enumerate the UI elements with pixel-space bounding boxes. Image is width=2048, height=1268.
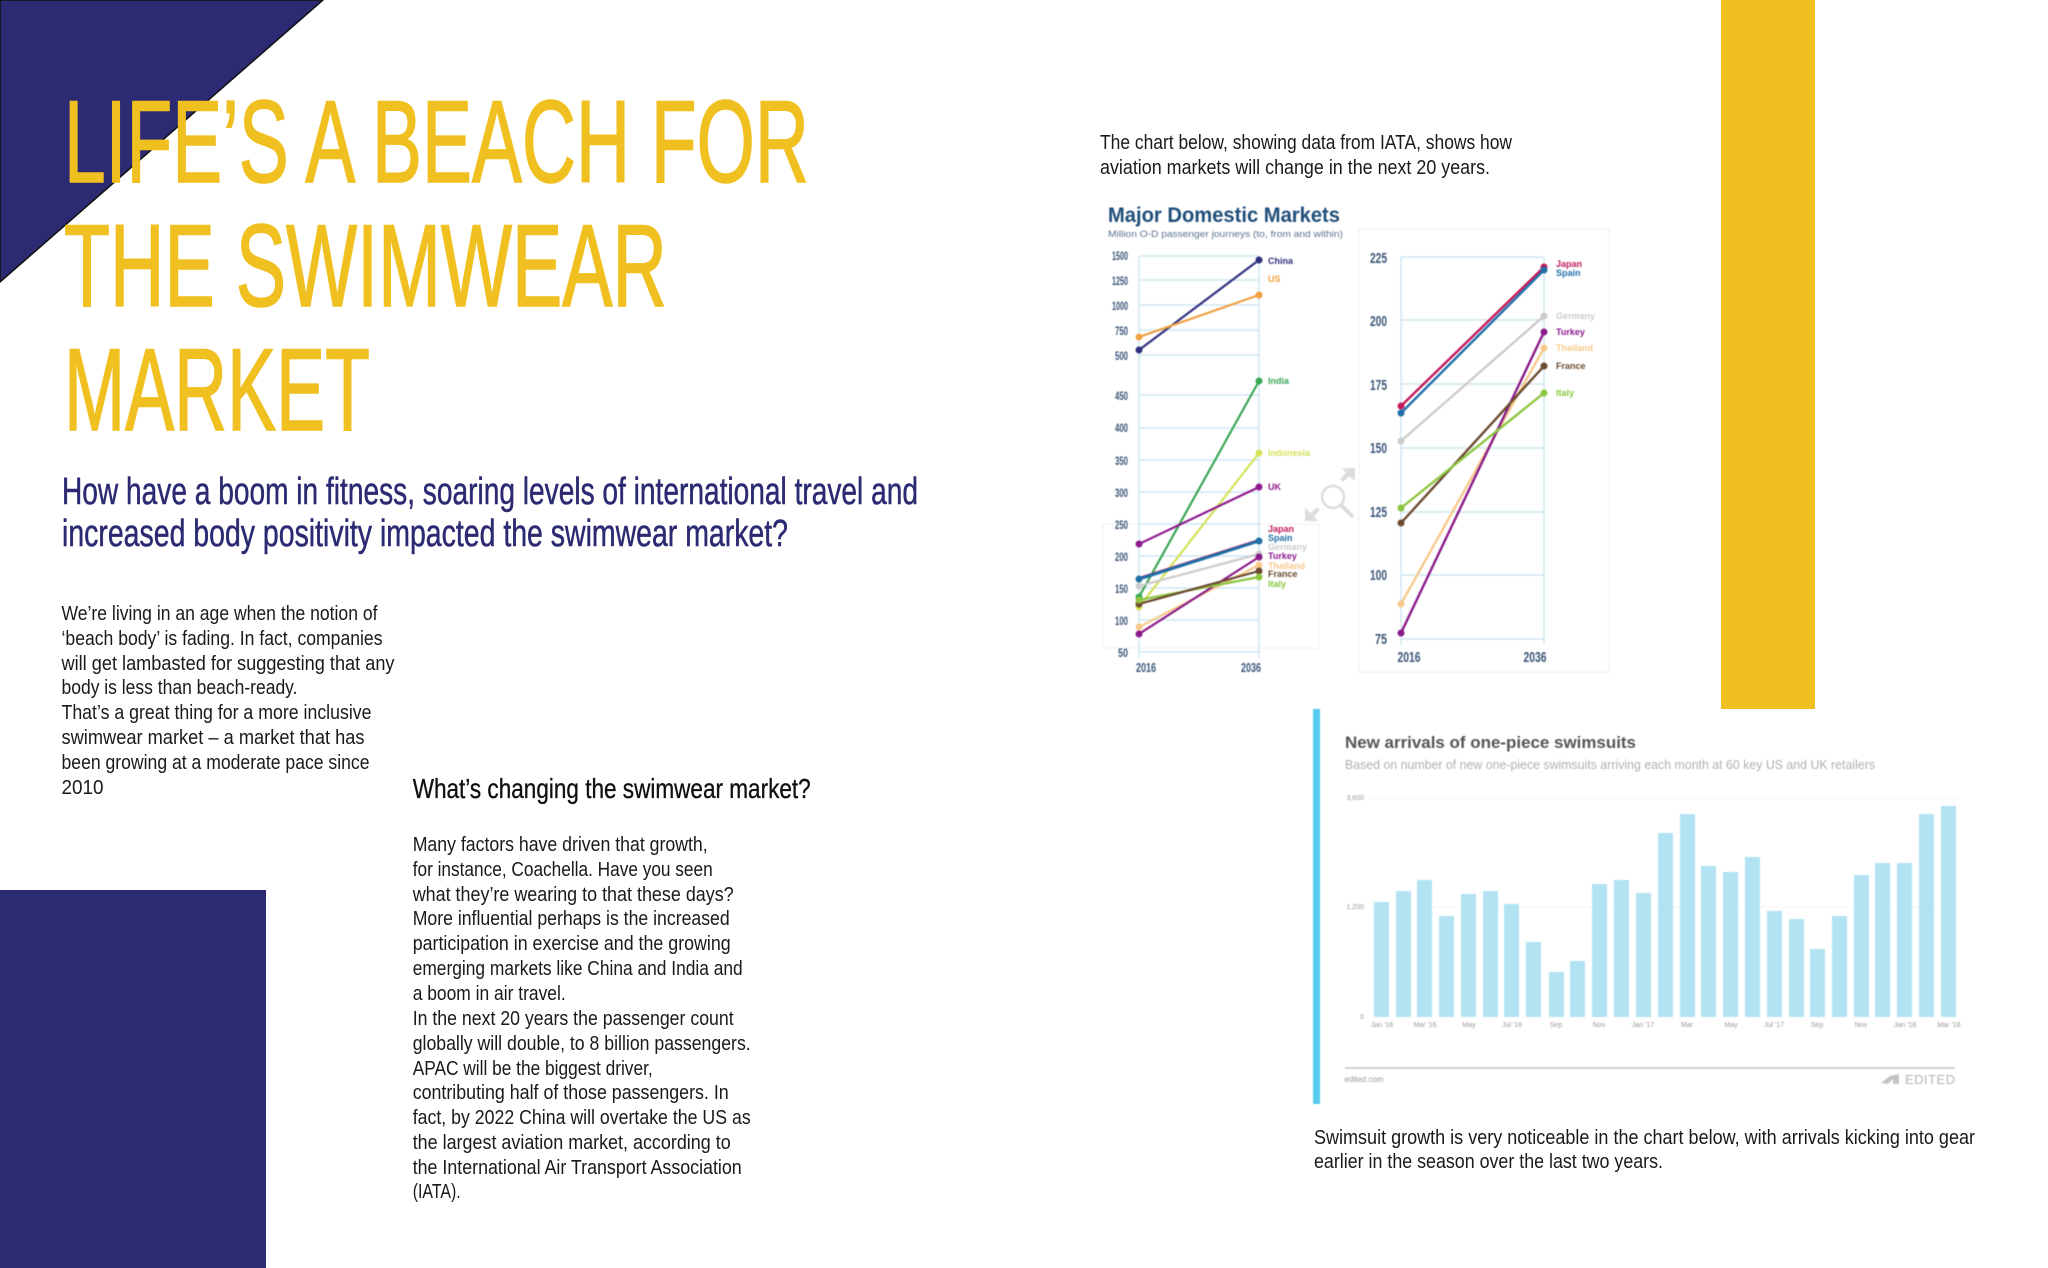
series labels: Japan: [1556, 259, 1582, 269]
x-axis labels: Jul '17: [1764, 1022, 1784, 1029]
EDITED logo: [1881, 1072, 1955, 1087]
axis labels: 125: [1370, 504, 1387, 521]
series labels: Thailand: [1268, 561, 1305, 571]
chart caption: swimsuit growth: earlier in the season over the last two years.: [1314, 1151, 1663, 1173]
bars: [1374, 806, 1956, 1017]
series labels: US: [1268, 274, 1281, 284]
y-axis labels: 0: [1360, 1014, 1364, 1021]
body text block: APAC will be the biggest driver,: [413, 1058, 653, 1080]
zoom detail box: [1103, 524, 1319, 648]
body text block: fact, by 2022 China will overtake the US as: [413, 1107, 751, 1129]
series labels: France: [1556, 361, 1586, 371]
left axis labels: 400: [1115, 421, 1128, 435]
year labels: [1398, 649, 1546, 666]
series labels: Thailand: [1556, 343, 1593, 353]
series labels: France: [1268, 569, 1298, 579]
left axis labels: 450: [1115, 389, 1128, 403]
axis labels: 75: [1375, 631, 1387, 648]
x-axis labels: Mar: [1681, 1022, 1694, 1029]
body text block: [412, 834, 751, 1203]
left axis labels: 500: [1115, 349, 1128, 363]
subtitle: How have a boom in fitness, soaring levels of international travel and: [62, 471, 918, 513]
body text block: More influential perhaps is the increased: [413, 908, 730, 930]
decorative navy corner triangle: [0, 0, 323, 282]
series labels: UK: [1268, 482, 1281, 492]
body text block: what they’re wearing to that these days?: [412, 884, 734, 906]
subtitle: increased body positivity impacted the swimwear market?: [62, 513, 788, 555]
intro text block: 2010: [62, 777, 104, 799]
series labels: Italy: [1268, 579, 1286, 589]
x-axis labels: May: [1724, 1022, 1738, 1029]
series labels: Turkey: [1556, 327, 1585, 337]
title: MARKET: [64, 324, 370, 455]
body text block: globally will double, to 8 billion passengers.: [413, 1033, 751, 1055]
panel: new arrivals bar chart: [1313, 709, 1961, 1104]
x-axis labels: Jan '16: [1371, 1022, 1393, 1029]
left axis labels: 100: [1115, 614, 1128, 628]
left axis labels: 1000: [1112, 299, 1128, 313]
year labels: 2016: [1136, 660, 1156, 675]
axis labels: 175: [1370, 377, 1387, 394]
x-axis labels: Jan '17: [1632, 1022, 1654, 1029]
series labels: Spain: [1556, 268, 1581, 278]
left axis labels: 150: [1115, 582, 1128, 596]
chart subheading: Based on number of new one-piece swimsuits arriving each month at 60 key US and UK retailers: [1345, 757, 1875, 772]
axis labels: [1370, 250, 1387, 648]
gridlines: [1368, 798, 1960, 907]
chart heading: Major Domestic Markets: [1108, 204, 1340, 227]
x-axis labels: May: [1462, 1022, 1476, 1029]
subtitle: [62, 471, 918, 555]
data lines: [1401, 267, 1544, 633]
left axis labels: 750: [1115, 324, 1128, 338]
section heading: What’s changing the swimwear market?: [413, 773, 811, 804]
chart caption: aviation markets: [1100, 132, 1512, 179]
body text block: the International Air Transport Association: [413, 1157, 742, 1179]
blue accent line: [1313, 709, 1320, 1104]
left axis labels: 300: [1115, 486, 1128, 500]
intro text block: swimwear market – a market that has: [62, 727, 364, 749]
body text block: a boom in air travel.: [413, 983, 566, 1005]
x-axis labels: Nov: [1855, 1022, 1868, 1029]
data points: [1136, 256, 1262, 638]
year labels: 2036: [1524, 649, 1546, 666]
left axis labels: 1500: [1112, 249, 1128, 263]
axis labels: 225: [1370, 250, 1387, 267]
body text block: Many factors have driven that growth,: [413, 834, 708, 856]
x-axis labels: Sep: [1550, 1022, 1562, 1029]
EDITED logo: EDITED: [1905, 1072, 1955, 1087]
body text block: contributing half of those passengers. In: [413, 1082, 729, 1104]
source text: edited.com: [1344, 1075, 1384, 1084]
y-axis labels: [1346, 795, 1364, 1021]
x-axis labels: Nov: [1593, 1022, 1606, 1029]
x-axis labels: Jul '16: [1502, 1022, 1522, 1029]
left axis labels: 50: [1118, 646, 1128, 660]
intro text block: That’s a great thing for a more inclusive: [62, 702, 372, 724]
title: THE SWIMWEAR: [64, 200, 667, 331]
y-axis labels: 1,200: [1346, 904, 1364, 911]
footer rule: [1345, 1067, 1955, 1069]
intro text block: body is less than beach-ready.: [62, 677, 298, 699]
series labels: China: [1268, 256, 1294, 266]
line chart: major domestic markets, detail: [1359, 229, 1609, 672]
chart caption: swimsuit growth: [1314, 1127, 1975, 1173]
y-axis labels: 3,600: [1346, 795, 1364, 802]
chart caption: aviation markets: The chart below, showing data from IATA, shows how: [1100, 132, 1512, 154]
left axis labels: [1112, 249, 1128, 660]
intro text block: We’re living in an age when the notion of: [62, 603, 378, 625]
x-axis labels: Mar '18: [1937, 1022, 1961, 1029]
axis labels: 200: [1370, 313, 1387, 330]
icon: magnifier with zoom arrows: [1305, 468, 1355, 521]
yellow vertical bar: [1721, 0, 1815, 709]
body text block: participation in exercise and the growing: [413, 933, 731, 955]
left axis labels: 200: [1115, 550, 1128, 564]
axis labels: 100: [1370, 567, 1387, 584]
intro text block: been growing at a moderate pace since: [62, 752, 370, 774]
x-axis labels: Mar '16: [1413, 1022, 1437, 1029]
intro text block: ‘beach body’ is fading. In fact, companies: [62, 628, 382, 650]
series labels: Germany: [1268, 542, 1307, 552]
body text block: (IATA).: [413, 1181, 461, 1203]
chart caption: swimsuit growth: Swimsuit growth is very noticeable in the chart below, with arrivals kicking into gear: [1314, 1127, 1975, 1149]
chart heading: New arrivals of one-piece swimsuits: [1345, 733, 1636, 752]
body text block: the largest aviation market, according to: [413, 1132, 731, 1154]
x-axis labels: Jan '18: [1894, 1022, 1916, 1029]
x-axis labels: Sep: [1811, 1022, 1823, 1029]
series labels: Japan: [1268, 524, 1294, 534]
year labels: 2016: [1398, 649, 1420, 666]
title: LIFE’S A BEACH FOR: [64, 76, 809, 207]
chart caption: aviation markets: aviation markets will change in the next 20 years.: [1100, 157, 1490, 179]
series labels: [1268, 256, 1311, 589]
series labels: Spain: [1268, 533, 1293, 543]
series labels: [1556, 259, 1595, 398]
intro text block: will get lambasted for suggesting that any: [61, 653, 394, 675]
series labels: India: [1268, 376, 1290, 386]
data lines: [1139, 260, 1259, 634]
title: [64, 76, 809, 455]
body text block: for instance, Coachella. Have you seen: [413, 859, 713, 881]
series labels: Turkey: [1268, 551, 1297, 561]
data points: [1398, 264, 1548, 636]
series labels: Indonesia: [1268, 448, 1311, 458]
year labels: [1136, 660, 1261, 675]
axis labels: 150: [1370, 440, 1387, 457]
year labels: 2036: [1241, 660, 1261, 675]
navy block bottom left: [0, 890, 266, 1268]
body text block: emerging markets like China and India and: [413, 958, 743, 980]
body text block: In the next 20 years the passenger count: [413, 1008, 734, 1030]
left axis labels: 350: [1115, 454, 1128, 468]
left axis labels: 250: [1115, 518, 1128, 532]
chart subheading: Million O-D passenger journeys (to, from and within): [1108, 229, 1343, 239]
left axis labels: 1250: [1112, 274, 1128, 288]
line chart: major domestic markets, overview: [1103, 204, 1343, 675]
series labels: Germany: [1556, 311, 1595, 321]
intro text block: [61, 603, 394, 799]
chart frame: [1359, 229, 1609, 672]
x-axis labels: [1371, 1022, 1961, 1029]
series labels: Italy: [1556, 388, 1574, 398]
